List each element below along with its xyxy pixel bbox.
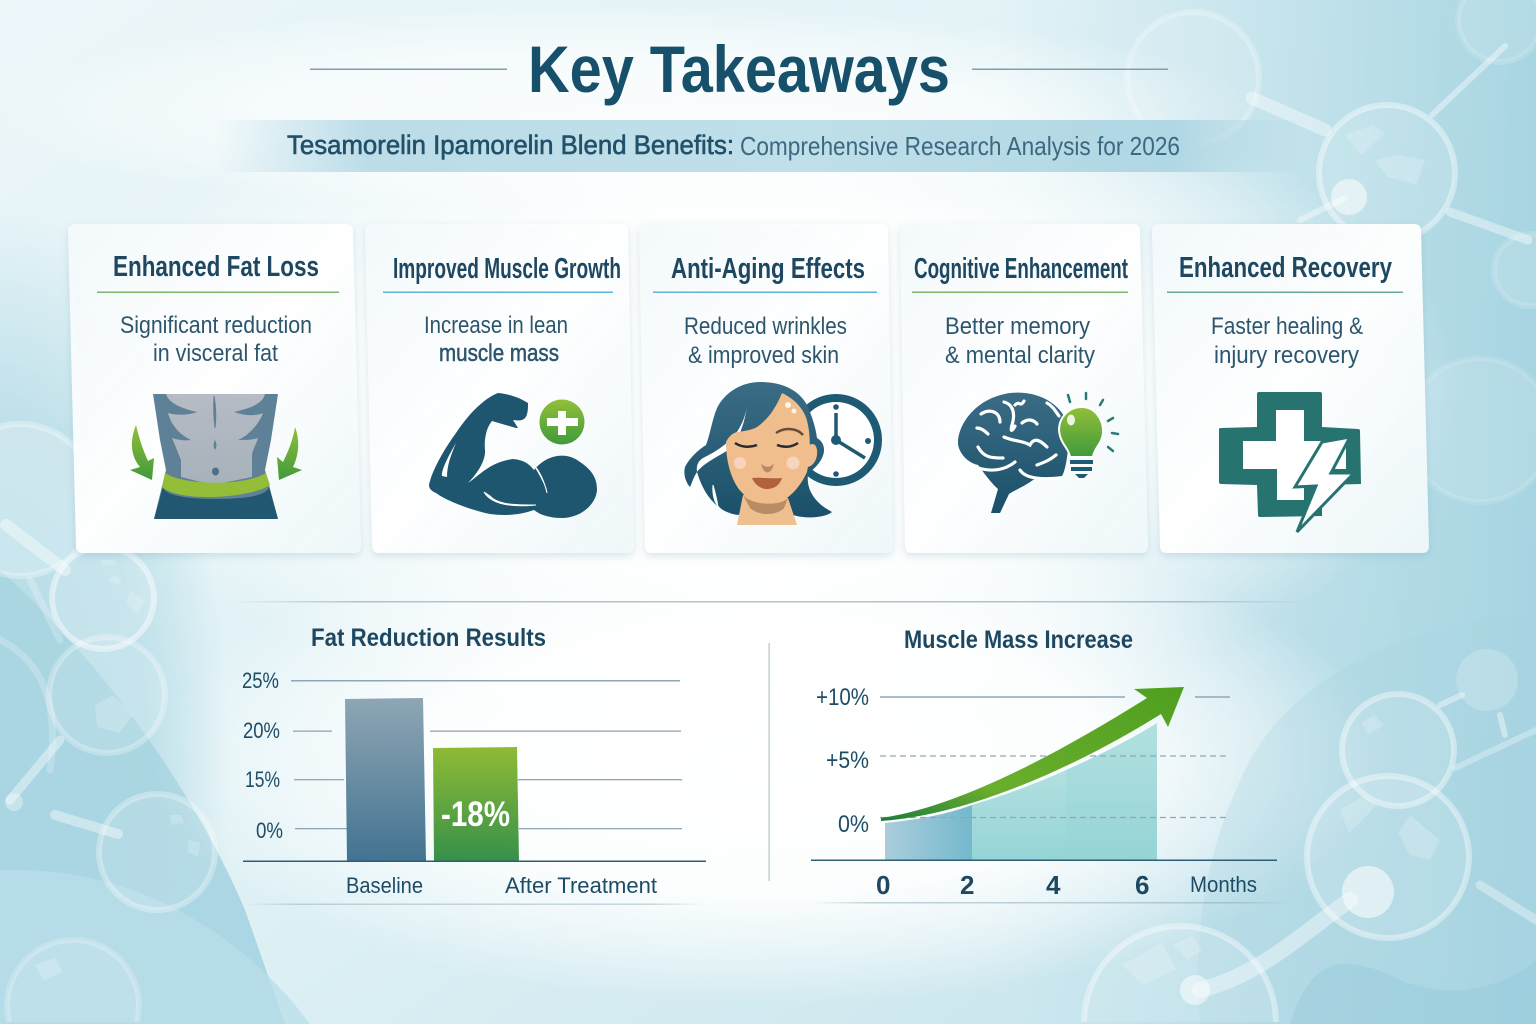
card: Anti-Aging Effects: [639, 224, 893, 553]
description: [120, 312, 312, 367]
x axis: [243, 860, 706, 862]
y axis labels: +10%: [816, 684, 869, 711]
card: Improved Muscle Growth: [365, 224, 634, 553]
description: Increase in lean: [424, 312, 568, 339]
description: Better memory: [945, 313, 1090, 340]
card: Enhanced Fat Loss: [68, 224, 361, 553]
description: & improved skin: [688, 342, 839, 369]
divider: [230, 601, 1310, 602]
area segments: [885, 805, 972, 860]
y axis labels: 20%: [243, 718, 280, 743]
x axis labels: 2: [960, 870, 974, 900]
chart: Muscle Mass Increase: Months: [1190, 872, 1257, 897]
vertical divider: [768, 643, 770, 881]
x axis: [811, 860, 1277, 861]
y axis labels: [242, 668, 283, 843]
x axis labels: 0: [876, 870, 890, 900]
y axis labels: +5%: [826, 747, 869, 774]
icon: medical cross with lightning bolt: [1219, 392, 1361, 532]
y axis labels: 0%: [256, 818, 283, 843]
chart title: Fat Reduction Results: [311, 624, 546, 652]
chart title: Muscle Mass Increase: [904, 626, 1133, 654]
description: Reduced wrinkles: [684, 313, 847, 340]
description: & mental clarity: [945, 342, 1095, 369]
description: muscle mass: [439, 340, 559, 367]
gridlines: [880, 697, 1230, 818]
heading: Anti-Aging Effects: [671, 253, 865, 285]
x axis labels: [876, 870, 1149, 900]
icon: flexed arm with plus: [429, 393, 597, 518]
gridlines: [291, 680, 682, 829]
left molecules: [0, 424, 96, 576]
x axis labels: [346, 873, 657, 898]
y axis labels: [816, 684, 869, 838]
heading: Improved Muscle Growth: [393, 253, 621, 285]
description: injury recovery: [1214, 342, 1359, 369]
card: Enhanced Recovery: [1152, 224, 1429, 553]
subtitle band: [215, 120, 1305, 172]
right bottom molecules: [1342, 694, 1454, 806]
y axis labels: 25%: [242, 668, 279, 693]
icon: brain with lightbulb: [958, 393, 1118, 513]
chart: Muscle Mass Increase: [811, 626, 1291, 904]
description: Significant reduction: [120, 312, 312, 339]
heading: Enhanced Recovery: [1179, 252, 1392, 284]
icon: face with clock: [684, 382, 882, 525]
growth arrow: [881, 687, 1184, 821]
y axis labels: 0%: [838, 811, 869, 838]
after treatment bar: [433, 747, 519, 861]
x axis labels: Baseline: [346, 873, 423, 898]
subtitle band: Tesamorelin Ipamorelin Blend Benefits:: [287, 130, 734, 160]
right top molecules: [1127, 12, 1259, 144]
icon: waist with arrows: [130, 394, 302, 519]
heading: Cognitive Enhancement: [914, 253, 1128, 285]
description: [684, 313, 847, 369]
chart: Fat Reduction Results: [242, 624, 706, 905]
subtitle band: Comprehensive Research Analysis for 2026: [740, 131, 1180, 161]
baseline bar: [345, 698, 426, 861]
card: Cognitive Enhancement: [900, 224, 1148, 553]
heading: Enhanced Fat Loss: [113, 251, 319, 283]
x axis labels: 4: [1046, 870, 1061, 900]
title: Key Takeaways: [528, 32, 950, 106]
description: Faster healing &: [1211, 313, 1363, 340]
y axis labels: 15%: [245, 767, 280, 792]
description: in visceral fat: [153, 340, 278, 367]
description: [1211, 313, 1363, 369]
x axis labels: After Treatment: [505, 873, 657, 898]
x axis labels: 6: [1135, 870, 1149, 900]
description: [424, 312, 568, 367]
description: [945, 313, 1095, 369]
bar value: -18%: [441, 795, 510, 834]
